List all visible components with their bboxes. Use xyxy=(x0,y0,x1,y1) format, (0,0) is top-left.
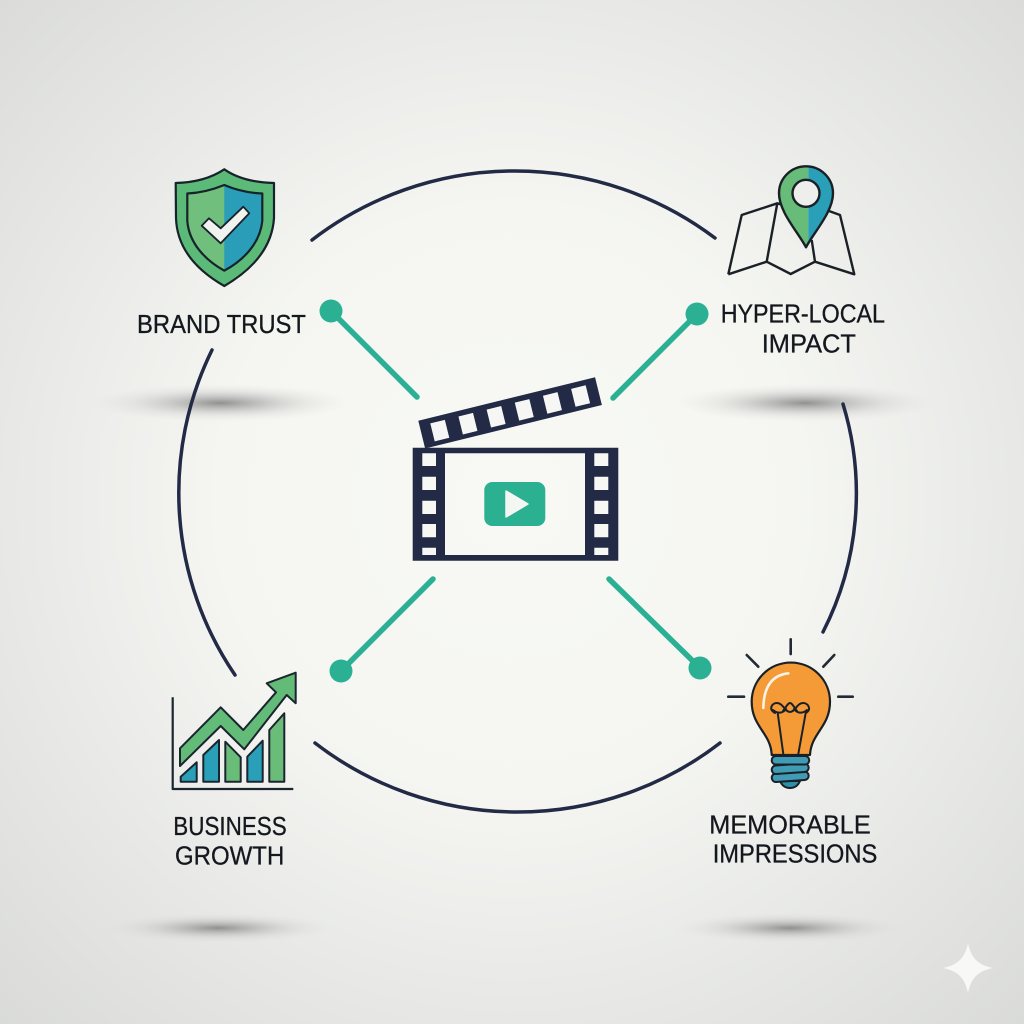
bulb glass xyxy=(752,663,830,755)
connector: hyper-local impact xyxy=(613,302,708,398)
checkmark xyxy=(202,207,249,243)
label: memorable impressions xyxy=(709,809,877,869)
film frame xyxy=(413,448,618,561)
filament xyxy=(771,703,809,754)
rising arrow xyxy=(180,673,296,766)
play button xyxy=(484,482,545,526)
bulb highlight xyxy=(763,673,788,708)
chart axes xyxy=(173,697,293,789)
chart bars xyxy=(181,713,284,782)
label: memorable impressions: MEMORABLE xyxy=(709,809,871,839)
label: memorable impressions: IMPRESSIONS xyxy=(713,839,877,869)
icon: central film clapper xyxy=(413,377,618,561)
connector: brand trust xyxy=(320,300,417,397)
label: hyper-local impact: IMPACT xyxy=(762,329,856,359)
ring arc: top xyxy=(312,171,715,240)
shield outer xyxy=(176,169,274,286)
icon: sparkle watermark xyxy=(943,943,993,993)
icon: growth chart xyxy=(173,673,296,789)
label: business growth xyxy=(173,811,287,870)
ring arc: left xyxy=(179,350,235,675)
folded map xyxy=(728,203,854,274)
ground shadows xyxy=(90,384,935,943)
ring arc: bottom xyxy=(315,743,720,812)
label: hyper-local impact: HYPER-LOCAL xyxy=(721,299,885,329)
icon: map with pin xyxy=(728,166,854,274)
teal connectors xyxy=(320,300,712,682)
location pin xyxy=(779,166,833,247)
bulb rays xyxy=(728,639,853,697)
shield inner xyxy=(188,186,224,269)
label: business growth: BUSINESS xyxy=(173,811,287,841)
ring arc: right xyxy=(823,404,856,632)
connector: memorable impressions xyxy=(609,579,712,680)
icon: shield xyxy=(176,169,274,286)
label: brand trust: BRAND TRUST xyxy=(137,309,306,339)
segmented ring xyxy=(179,171,856,812)
icon: light bulb xyxy=(728,639,853,788)
clapper strip xyxy=(418,377,602,448)
label: hyper-local impact xyxy=(721,299,885,359)
label: business growth: GROWTH xyxy=(175,840,284,870)
screw base xyxy=(771,756,809,788)
connector: business growth xyxy=(330,579,433,682)
